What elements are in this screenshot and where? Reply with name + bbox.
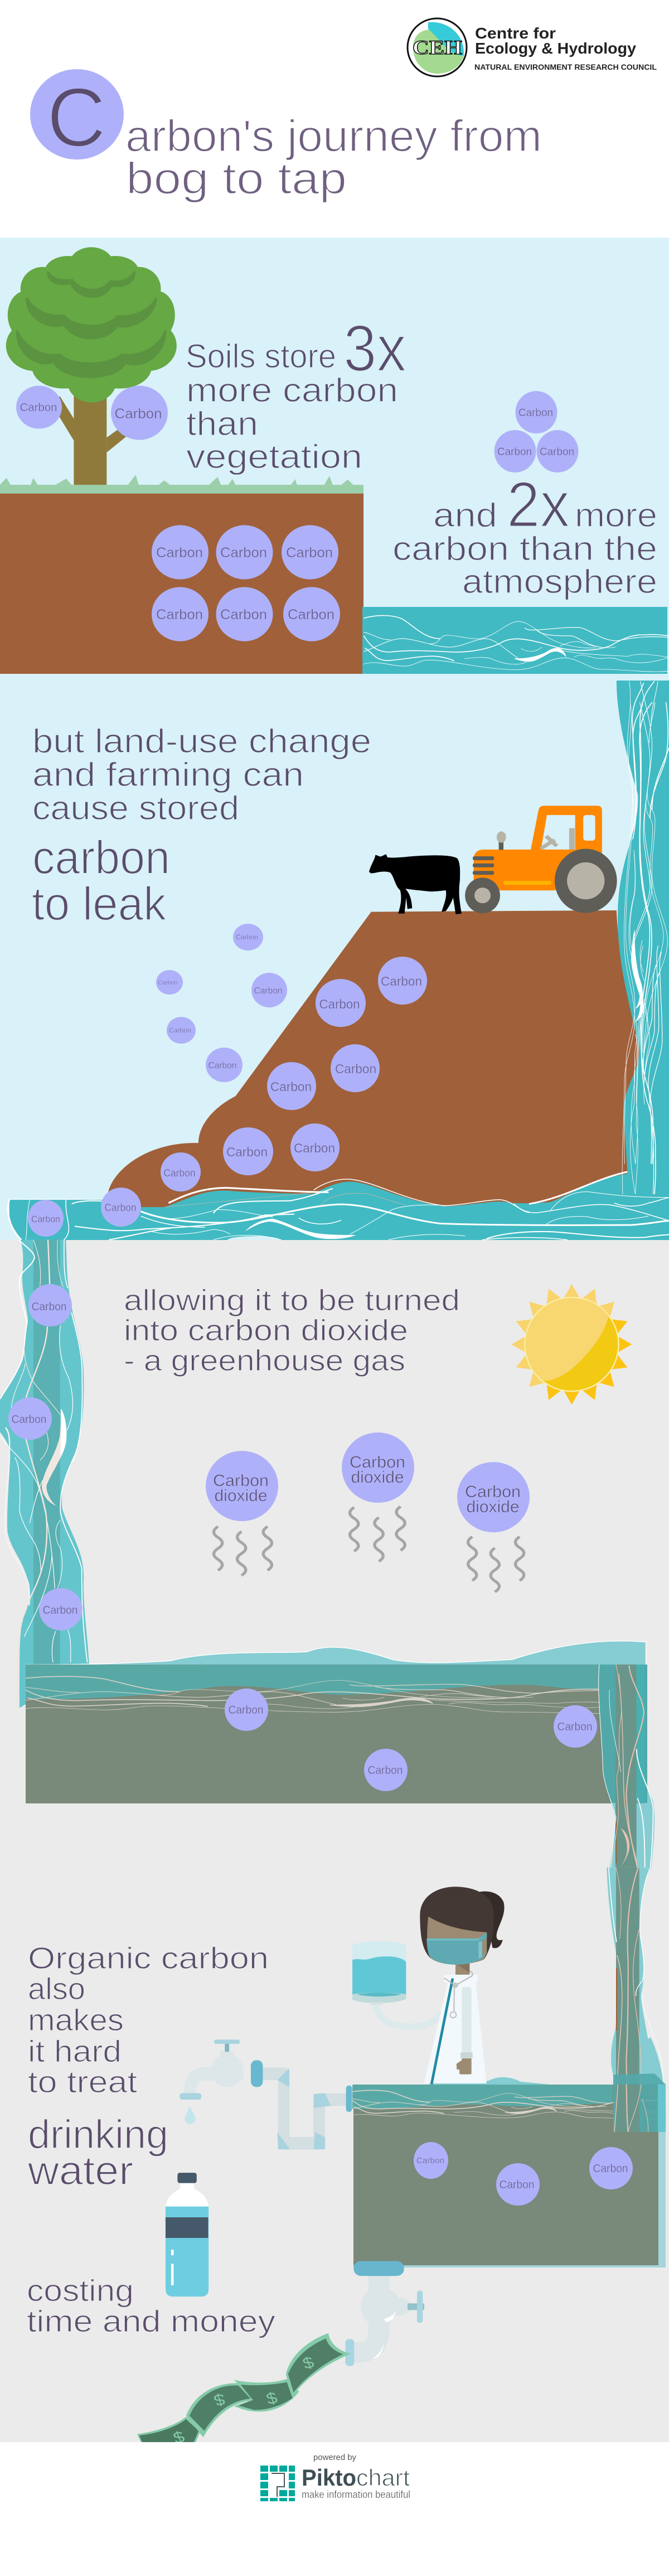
footer: powered by Piktochart: Pikto: [302, 2464, 356, 2491]
text: soils store 3x: vegetation: [186, 438, 362, 475]
text: allowing it to be turned into carbon dioxide: [124, 1284, 460, 1377]
footer: powered by Piktochart: powered by: [313, 2453, 356, 2462]
text: soils store 3x: more carbon: [186, 372, 398, 409]
text: organic carbon also makes it hard to treat: drinking: [28, 2112, 168, 2157]
water: top right: [362, 607, 669, 674]
carbon in stream 3: [39, 1588, 83, 1630]
text: and 2x more carbon than the atmosphere: more: [575, 496, 657, 534]
icon: money ribbon: $: [212, 2390, 227, 2409]
text: organic carbon also makes it hard to treat: water: [27, 2149, 133, 2193]
carbon in reservoir 1b: Carbon: [368, 1764, 403, 1777]
footer: powered by Piktochart: make information beautiful: [302, 2489, 410, 2500]
text: soils store 3x: [186, 312, 406, 475]
text: but land-use change: cause stored: [32, 789, 239, 827]
leaking carbon 3: [251, 973, 287, 1007]
carbon in soil 3: Carbon: [286, 545, 333, 561]
carbon in stream 1: [28, 1284, 72, 1326]
carbon dioxide bubble 1: dioxide: [214, 1487, 268, 1505]
hill carbon 5: Carbon: [226, 1145, 268, 1159]
text: costing time and money: [27, 2273, 276, 2338]
carbon in soil 5: Carbon: [220, 607, 267, 623]
carbon at stream head 2: [101, 1188, 141, 1227]
leaking carbon 2: Carbon: [158, 980, 177, 986]
text: organic carbon also makes it hard to treat: Organic carbon: [28, 1941, 269, 1975]
hill carbon 7: [161, 1152, 201, 1191]
footer: powered by Piktochart: chart: [356, 2464, 410, 2491]
stream joining reservoirs: [599, 1665, 666, 2132]
carbon at stream head 1: [28, 1200, 64, 1237]
carbon in soil 6: [283, 587, 340, 641]
carbon at stream head 2: Carbon: [105, 1202, 136, 1213]
carbon dioxide bubble 2: dioxide: [351, 1468, 404, 1487]
title: Carbon's journey from bog to tap: C: [47, 70, 106, 164]
text: but land-use change: but land-use change: [32, 722, 371, 760]
text: and 2x more carbon than the atmosphere: and: [433, 496, 497, 534]
leaking carbon 3: Carbon: [254, 986, 282, 996]
hill carbon 3: [267, 1062, 316, 1110]
carbon in tree, small: Carbon: [20, 402, 57, 414]
hill carbon 3: Carbon: [270, 1079, 312, 1094]
carbon in stream 2: Carbon: [11, 1414, 47, 1426]
carbon dioxide bubble 3: dioxide: [466, 1498, 520, 1516]
text: but land-use change: to leak: [32, 877, 167, 930]
reservoir 1: [25, 1641, 646, 1803]
hill carbon 4: [331, 1044, 380, 1092]
carbon dioxide bubble 3: Carbon: [465, 1483, 521, 1501]
text: and 2x more carbon than the atmosphere: atmosphere: [462, 563, 657, 600]
carbon in tree, small: [16, 386, 62, 428]
carbon in tank 1: Carbon: [416, 2156, 444, 2165]
icon: money ribbon: $: [171, 2428, 187, 2447]
reservoir 2 tank: [352, 2073, 666, 2268]
carbon in soil 1: Carbon: [156, 545, 203, 561]
text: and 2x more carbon than the atmosphere: 2x: [507, 469, 570, 541]
hill carbon 6: Carbon: [294, 1141, 335, 1155]
panel: greenhouse gas (grey background): [0, 1240, 669, 2442]
soil block with grass: [0, 475, 363, 674]
carbon in soil 2: Carbon: [220, 545, 267, 561]
leaking carbon 1: Carbon: [236, 933, 258, 941]
atmosphere carbon trio: Carbon: [497, 446, 532, 458]
carbon in tank 1: [414, 2142, 448, 2179]
atmosphere carbon trio: Carbon: [540, 446, 574, 458]
leaking carbon 4: [167, 1017, 196, 1044]
footer: powered by Piktochart: [0, 2442, 669, 2576]
hill carbon 1: [316, 979, 366, 1027]
atmosphere carbon trio: Carbon: [518, 407, 553, 419]
carbon in stream 2: [8, 1397, 52, 1440]
text: but land-use change: [32, 722, 371, 930]
text: allowing it to be turned into carbon dioxide: - a greenhouse gas: [124, 1344, 405, 1377]
text: soils store 3x: Soils store: [186, 337, 336, 375]
hill carbon 4: Carbon: [335, 1062, 376, 1076]
icon: tree: [6, 247, 177, 486]
leaking carbon 5: [206, 1048, 243, 1082]
text: allowing it to be turned into carbon dioxide: allowing it to be turned: [124, 1284, 460, 1317]
bottom water pool: [8, 1171, 669, 1244]
carbon in tree, large: Carbon: [115, 406, 162, 422]
text: but land-use change: carbon: [32, 831, 170, 884]
text: but land-use change: and farming can: [32, 756, 304, 793]
carbon in tank 3: [589, 2147, 633, 2189]
carbon dioxide bubble 2: [342, 1432, 414, 1503]
leaking carbon 1: [233, 924, 263, 951]
header logo: Centre for Ecology & Hydrology: Centre for: [475, 25, 556, 42]
icon: cow: [369, 854, 462, 914]
carbon in reservoir 1a: [225, 1689, 268, 1731]
text: organic carbon also makes it hard to treat: to treat: [28, 2064, 137, 2099]
carbon in soil 6: Carbon: [288, 607, 334, 623]
text: organic carbon also makes it hard to treat: [27, 1941, 269, 2193]
text: soils store 3x: 3x: [343, 312, 406, 385]
text: allowing it to be turned into carbon dioxide: into carbon dioxide: [124, 1314, 408, 1347]
hill carbon 2: Carbon: [381, 974, 422, 988]
title: Carbon's journey from bog to tap: bog to tap: [126, 153, 347, 203]
icon: money ribbon: $: [300, 2353, 317, 2373]
carbon in tank 2: Carbon: [500, 2179, 534, 2191]
carbon in soil 2: [216, 525, 273, 580]
header logo: Centre for Ecology & Hydrology: Ecology & Hydrology: [475, 40, 636, 57]
carbon in tank 3: Carbon: [593, 2163, 628, 2175]
header logo: Centre for Ecology & Hydrology: [408, 18, 657, 76]
title: Carbon's journey from bog to tap: arbon's journey from: [125, 111, 542, 161]
carbon in reservoir 1b: [364, 1749, 408, 1791]
header logo: Centre for Ecology & Hydrology: NATURAL ENVIRONMENT RESEARCH COUNCIL: [474, 63, 657, 71]
carbon in soil 1: [152, 525, 209, 580]
text: and 2x more carbon than the atmosphere: carbon than the: [392, 530, 657, 567]
icon: money ribbon: [137, 2333, 351, 2447]
hill carbon 7: Carbon: [164, 1168, 195, 1179]
carbon at stream head 1: Carbon: [31, 1214, 60, 1224]
eroding hillside: [108, 910, 640, 1214]
text: organic carbon also makes it hard to treat: it hard: [28, 2034, 122, 2068]
text: organic carbon also makes it hard to treat: also: [28, 1971, 85, 2006]
icon: water bottle: [166, 2173, 209, 2297]
icon: tap and pipe: [180, 2039, 352, 2149]
carbon in tank 2: [496, 2163, 540, 2206]
carbon in reservoir 1a: Carbon: [229, 1704, 263, 1716]
carbon in stream 1: Carbon: [31, 1301, 67, 1313]
left stream: [0, 1240, 89, 1708]
text: soils store 3x: than: [186, 405, 258, 442]
carbon in soil 5: [216, 587, 273, 641]
river down the right edge: [617, 681, 669, 1194]
atmosphere carbon trio: [494, 391, 579, 472]
hill carbon 1: Carbon: [319, 997, 360, 1011]
carbon in reservoir 1c: Carbon: [558, 1721, 592, 1733]
carbon in soil 4: Carbon: [156, 607, 203, 623]
carbon in soil 4: [152, 587, 209, 641]
gas squiggles: [214, 1507, 524, 1592]
text: organic carbon also makes it hard to treat: makes: [28, 2003, 124, 2037]
icon: tractor: [465, 806, 617, 913]
icon: outlet tap: [345, 2261, 424, 2366]
carbon dioxide bubble 3: [457, 1462, 530, 1532]
leaking carbon 2: [156, 970, 183, 995]
leaking carbon 4: Carbon: [169, 1026, 191, 1034]
text: costing time and money: costing: [27, 2273, 134, 2308]
carbon in stream 3: Carbon: [42, 1604, 78, 1617]
panel: soils (sky background): [0, 238, 669, 1242]
hill carbon 2: [378, 957, 427, 1005]
carbon dioxide bubble 1: [206, 1451, 278, 1521]
text: costing time and money: time and money: [27, 2304, 276, 2338]
carbon dioxide bubble 2: Carbon: [350, 1453, 405, 1472]
icon: money ribbon: $: [264, 2389, 280, 2408]
carbon dioxide bubble 1: Carbon: [213, 1472, 269, 1490]
leaking carbon 5: Carbon: [209, 1061, 236, 1070]
header logo: Centre for Ecology & Hydrology: CEH: [413, 36, 462, 59]
icon: sun: [512, 1284, 632, 1405]
text: and 2x more carbon than the atmosphere: [392, 469, 657, 600]
carbon in soil 3: [282, 525, 338, 580]
carbon in reservoir 1c: [554, 1705, 597, 1748]
title: Carbon's journey from bog to tap: [30, 69, 542, 203]
hill carbon 5: [223, 1127, 273, 1175]
hill carbon 6: [290, 1123, 340, 1171]
carbon in tree, large: [111, 385, 168, 440]
icon: scientist with water sample: [352, 1887, 505, 2085]
